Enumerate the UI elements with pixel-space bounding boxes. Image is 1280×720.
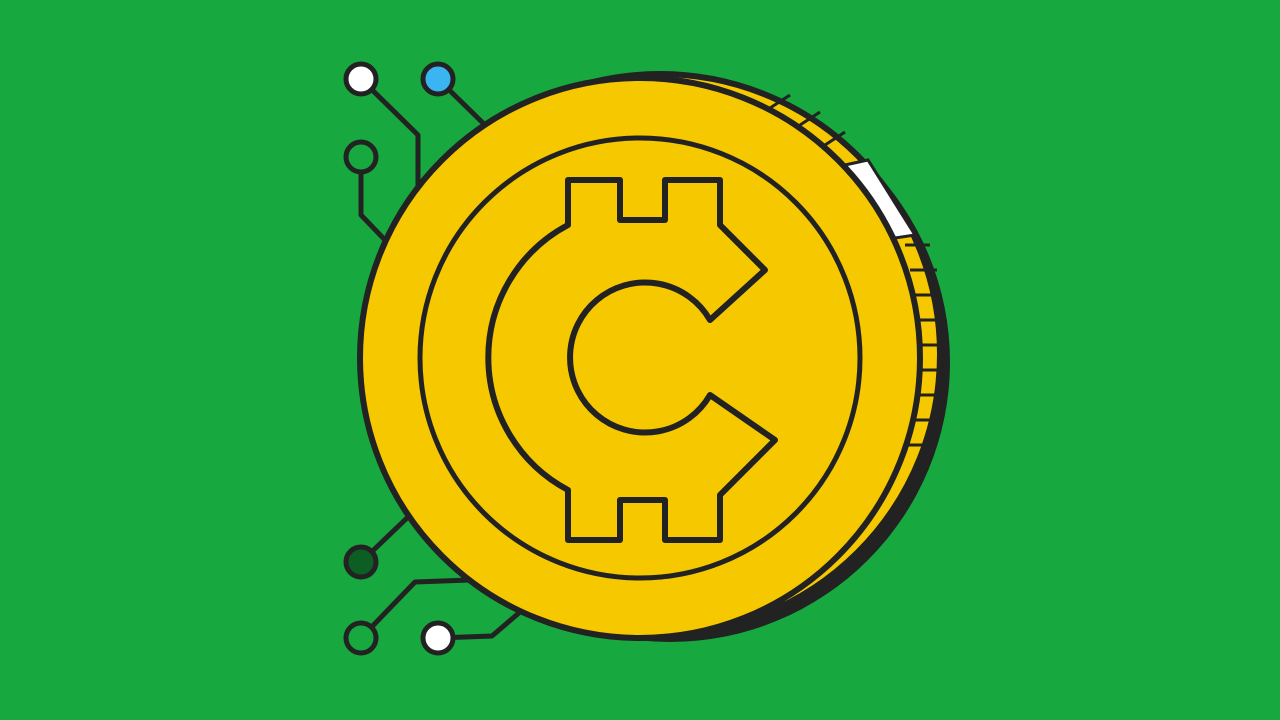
coin shadow	[390, 82, 950, 642]
coin symbol	[488, 180, 775, 540]
coin edge	[380, 74, 940, 634]
inner ring	[420, 138, 860, 578]
coin	[360, 74, 950, 642]
edge highlight	[845, 160, 915, 238]
edge stripes	[770, 95, 942, 445]
circuit dots	[346, 64, 453, 653]
circuit lines	[361, 79, 520, 638]
coin face	[360, 78, 920, 638]
